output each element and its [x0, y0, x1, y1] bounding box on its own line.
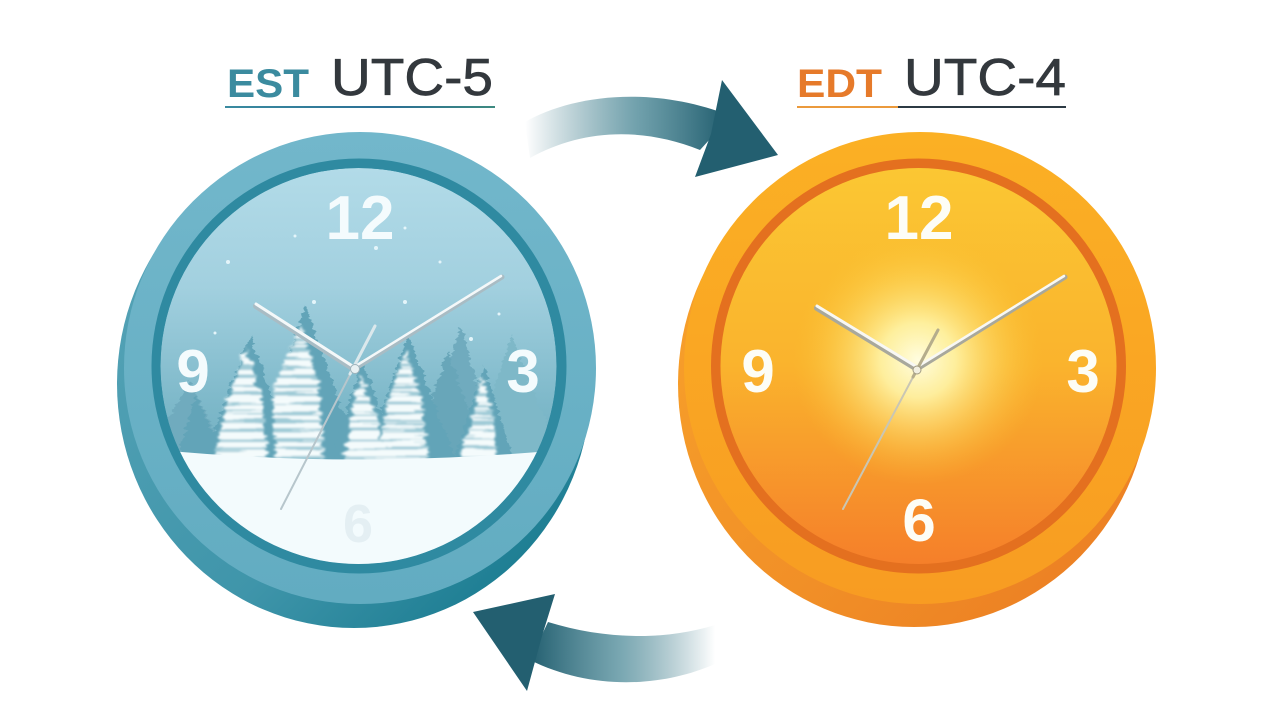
- inner ring: [152, 158, 566, 574]
- snowy ground: [180, 452, 537, 564]
- numerals: 9: [741, 338, 775, 405]
- clock: EDT summer: [678, 132, 1156, 627]
- winter dial scene: [150, 168, 570, 580]
- arrow: EST to EDT: [525, 80, 778, 177]
- numerals: 9: [176, 338, 210, 405]
- clock rim side: [117, 140, 591, 628]
- heading: EST UTC-5: UTC-5: [331, 49, 493, 107]
- clock rim face: [684, 132, 1156, 604]
- clock rim side: [678, 141, 1150, 627]
- background trees: [150, 325, 560, 460]
- clock rim face: [124, 132, 596, 604]
- snow on trees: [214, 325, 496, 462]
- heading: EST UTC-5: [225, 49, 495, 108]
- sun glow: [793, 235, 1043, 485]
- snowflakes: [214, 226, 500, 341]
- numerals: 6: [902, 487, 936, 554]
- clock hands: [817, 276, 1065, 509]
- clock: EST winter: [117, 132, 596, 628]
- inner ring: [711, 158, 1126, 574]
- numerals: [741, 184, 1100, 554]
- numerals: 3: [506, 338, 540, 405]
- heading: EDT UTC-4: EDT: [797, 62, 882, 106]
- heading: EDT UTC-4: [797, 49, 1066, 108]
- numerals: 12: [885, 184, 953, 253]
- numerals: 12: [326, 184, 394, 253]
- pine trees: [178, 305, 515, 465]
- summer dial: [720, 168, 1116, 564]
- heading: EDT UTC-4: UTC-4: [904, 49, 1066, 107]
- numerals: 6: [343, 494, 373, 554]
- arrow: EDT to EST: [473, 594, 715, 691]
- clock hands: [256, 276, 502, 509]
- heading: EST UTC-5: EST: [227, 62, 309, 106]
- numerals: 3: [1066, 338, 1100, 405]
- numerals: [176, 184, 540, 554]
